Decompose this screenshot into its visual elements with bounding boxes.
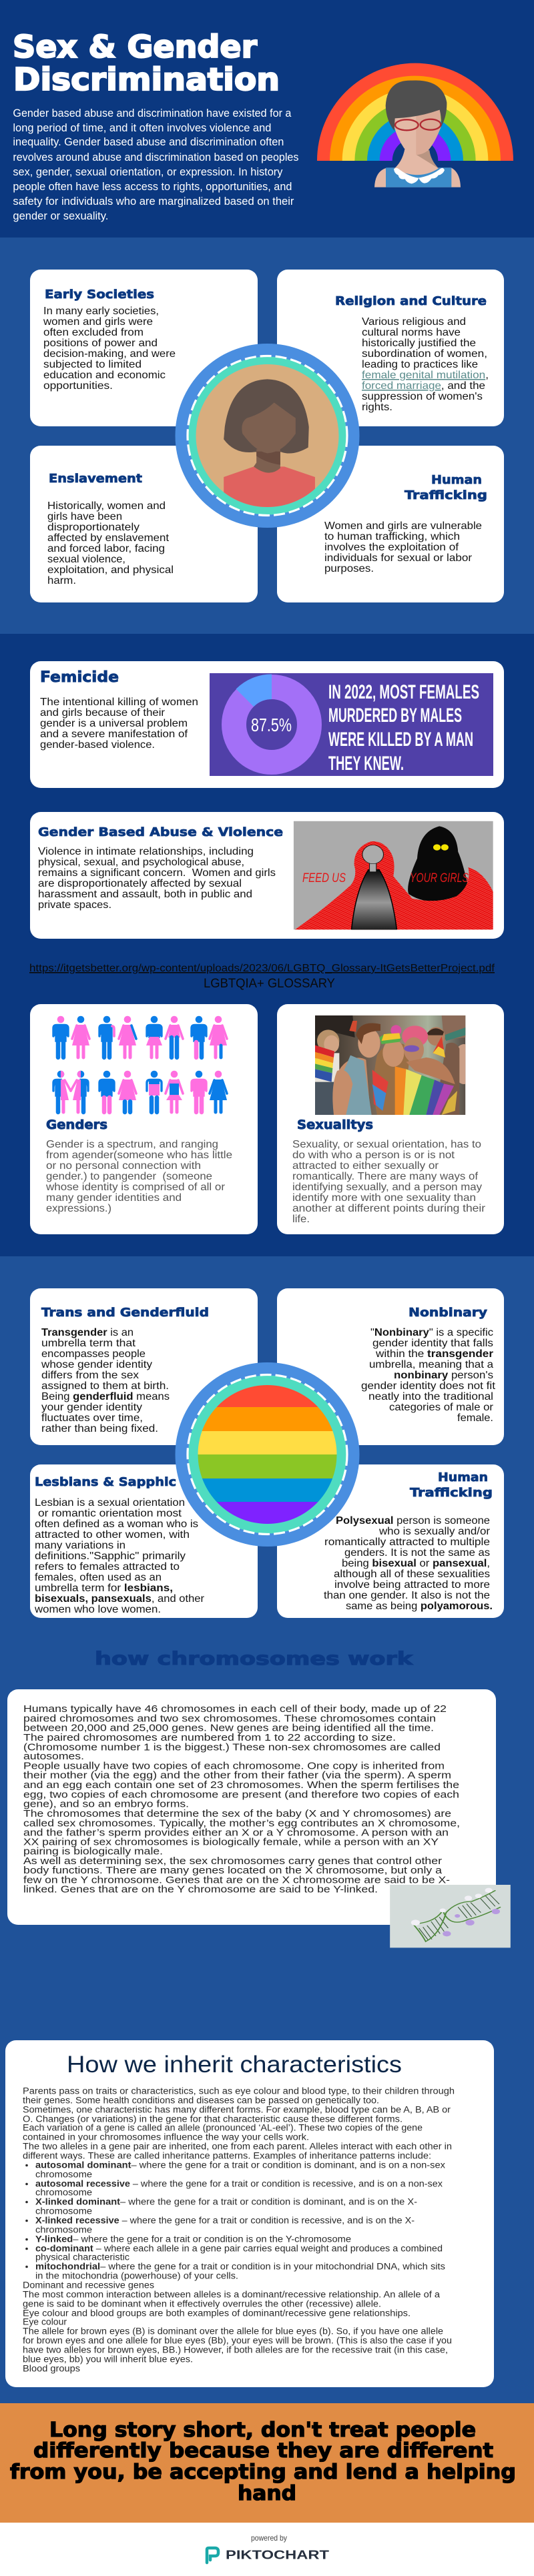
panel: genders xyxy=(30,1004,258,1234)
text: human trafficking: to human trafficking, which xyxy=(324,531,460,542)
list: inheritance patterns: chromosome xyxy=(35,2170,92,2180)
text: inheritance intro: O. Changes (or variations) in the gene for that characteristic cause these different forms. xyxy=(23,2114,403,2124)
text: dominant and recessive genes: Dominant and recessive genes xyxy=(23,2280,154,2290)
text: chromosomes: linked. Genes that are on the Y chromosome are said to be Y-linked. xyxy=(23,1884,378,1895)
text: inheritance intro xyxy=(23,2086,455,2161)
text: chromosomes: The chromosomes that determine the sex of the baby (X and Y chromosomes) are xyxy=(23,1808,451,1819)
title xyxy=(13,29,280,97)
title: Sex & Gender xyxy=(13,29,257,65)
text: nonbinary: "Nonbinary" is a specific xyxy=(370,1327,493,1338)
text: dominant and recessive genes xyxy=(23,2280,452,2374)
text: dominant and recessive genes: Blood groups xyxy=(23,2364,80,2374)
text: polysexual: although all of these sexualities xyxy=(334,1569,490,1580)
text: nonbinary xyxy=(361,1327,496,1424)
text: human trafficking: Women and girls are vulnerable xyxy=(324,520,482,532)
text: dominant and recessive genes: The most common interaction between alleles is a dominant/recessive relationship. An allele of a xyxy=(23,2290,441,2300)
chart: 87.5% donut statistic: THEY KNEW. xyxy=(328,753,404,775)
text: inheritance intro: The two alleles in a gene pair are inherited, one from each parent. Alleles interact with each other in xyxy=(23,2142,452,2152)
text: religion and culture: forced marriage , and the xyxy=(362,380,485,392)
text: gender based abuse xyxy=(38,846,276,911)
text: trans and genderfluid: your gender identity xyxy=(41,1402,142,1413)
text: chromosomes: between 20,000 and 25,000 genes. New genes are being identified all the time. xyxy=(23,1723,434,1734)
panel: enslavement xyxy=(30,446,258,602)
text: genders: expressions.) xyxy=(46,1203,111,1214)
text: chromosomes: paired chromosomes and two sex chromosomes. These chromosomes contain xyxy=(23,1713,436,1724)
intro text: people often have less access to rights, opportunities, and xyxy=(13,180,292,193)
text: sexualitys: identifying sexually, and a person may xyxy=(292,1182,482,1193)
text: polysexual: who is sexually and/or xyxy=(378,1526,491,1537)
footer: powered by piktochart: PIKTOCHART xyxy=(226,2549,329,2562)
text: femicide: gender is a universal problem xyxy=(40,718,188,729)
text: chromosomes: autosomes. xyxy=(23,1751,84,1762)
text: trans and genderfluid: encompasses people xyxy=(41,1348,146,1360)
text: polysexual: Polysexual person is someone xyxy=(336,1515,490,1527)
text: human trafficking xyxy=(324,520,482,574)
text: lesbians and sapphic: refers to females attracted to xyxy=(35,1561,180,1573)
text: dominant and recessive genes: for brown eyes and one allele for blue eyes (Bb), your eyes will be brown. (This is also the case if you xyxy=(23,2335,452,2345)
text: enslavement: and forced labor, facing xyxy=(47,543,165,554)
text: genders: whose identity is comprised of all or xyxy=(45,1182,226,1193)
text: lesbians and sapphic: attracted to other women, with xyxy=(35,1529,190,1541)
text: genders xyxy=(45,1139,232,1214)
text: genders: gender.) to pangender (someone xyxy=(46,1171,212,1182)
text: human trafficking: involves the exploitation of xyxy=(324,542,459,553)
text: early societies: opportunities. xyxy=(43,380,113,392)
text: sexualitys xyxy=(292,1139,486,1225)
heading: nonbinary: Nonbinary xyxy=(409,1306,487,1320)
footer: powered by piktochart: powered by xyxy=(251,2533,287,2543)
illustration: red cloaked girl and shadow figure: YOUR GIRLS xyxy=(410,871,469,885)
text: sexualitys: romantically. There are many ways of xyxy=(292,1171,479,1182)
list: inheritance patterns: X-linked recessive – where the gene for a trait or condition is recessive, and is on the X- xyxy=(35,2216,415,2226)
text: religion and culture: Various religious and xyxy=(362,316,466,328)
list: inheritance patterns: chromosome xyxy=(35,2225,92,2235)
panel: religion and culture xyxy=(277,270,504,426)
chart: 87.5% donut statistic: 87.5% xyxy=(251,715,292,735)
text: chromosomes xyxy=(23,1703,460,1895)
text: inheritance intro: Each variation of a gene is called an allele (pronounced ‘AL-eel’). These two copies of the gene xyxy=(23,2123,423,2133)
text: nonbinary: gender identity that falls xyxy=(372,1338,493,1349)
intro text: revolves around abuse and discrimination based on peoples xyxy=(13,151,298,163)
text: trans and genderfluid: assigned to them at birth. xyxy=(41,1380,169,1392)
panel: trans and genderfluid xyxy=(30,1288,258,1445)
text: dominant and recessive genes: Eye colour and blood groups are both examples of dominant/recessive gene relationships. xyxy=(23,2308,411,2318)
text: genders: or no personal connection with xyxy=(46,1160,201,1172)
text: enslavement: girls have been xyxy=(47,511,122,522)
heading: how we inherit characteristics: How we inherit characteristics xyxy=(67,2052,402,2078)
intro text: Gender based abuse and discrimination have existed for a xyxy=(13,107,292,119)
text: nonbinary: neatly into the traditional xyxy=(368,1391,493,1402)
text: religion and culture: female genital mutilation , xyxy=(362,370,489,381)
text: religion and culture: rights. xyxy=(362,402,392,413)
text: nonbinary: gender identity does not fit xyxy=(361,1380,496,1392)
list: inheritance patterns: mitochondrial – where the gene for a trait or condition is in your mitochondrial DNA, which sits xyxy=(35,2262,445,2272)
text: religion and culture: leading to practices like xyxy=(362,359,478,370)
text: trans and genderfluid: umbrella term that xyxy=(41,1338,136,1349)
image: DNA helix with flowers xyxy=(390,1885,511,1948)
text: chromosomes: body functions. There are many genes located on the X chromosome, but only a xyxy=(23,1865,443,1876)
heading: genders: Genders xyxy=(46,1118,107,1132)
text: chromosomes: XX pairing of sex chromosomes is biologically female, while a person with an XY xyxy=(23,1836,439,1847)
text: nonbinary: within the transgender xyxy=(375,1348,493,1360)
panel: closing message: from you, be accepting and lend a helping xyxy=(10,2461,516,2484)
intro text: safety for individuals who are marginalized based on their xyxy=(13,195,294,207)
glossary link xyxy=(29,963,495,991)
text: polysexual: than one gender. It also is not the xyxy=(324,1590,490,1601)
text: religion and culture: historically justified the xyxy=(362,338,476,349)
intro text: long period of time, and it often involves violence and xyxy=(13,121,271,134)
text: trans and genderfluid: Transgender is an xyxy=(41,1327,134,1338)
text: enslavement: sexual violence, xyxy=(47,554,125,565)
text: nonbinary: umbrella, meaning that a xyxy=(369,1359,493,1370)
panel: closing message: differently because they are different xyxy=(33,2439,493,2463)
text: lesbians and sapphic: or romantic orientation most xyxy=(38,1508,182,1519)
intro text: inequality. Gender based abuse and discrimination often xyxy=(13,135,284,148)
text: chromosomes: called sex chromosomes. Typically, the mother’s egg contributes an X chromosome, xyxy=(23,1817,460,1829)
title: Discrimination xyxy=(13,61,280,97)
text: nonbinary: categories of male or xyxy=(389,1402,494,1413)
text: religion and culture: cultural norms have xyxy=(362,327,461,338)
list: inheritance patterns: Y-linked – where the gene for a trait or condition is on the Y-chromosome xyxy=(35,2234,351,2244)
text: enslavement xyxy=(47,500,174,586)
text: enslavement: affected by enslavement xyxy=(47,532,170,544)
text: chromosomes: and the father’s sperm provides either an X or a Y chromosome. A person with an xyxy=(23,1827,449,1839)
text: femicide: and a severe manifestation of xyxy=(40,729,188,740)
heading: trans and genderfluid: Trans and Genderfluid xyxy=(41,1306,209,1320)
panel: early societies xyxy=(30,270,258,426)
heading: human trafficking: Trafficking xyxy=(405,488,487,502)
text: chromosomes: (Chromosome number 1 is the biggest.) These non-sex chromosomes are called xyxy=(23,1741,441,1753)
text: lesbians and sapphic: women who love women. xyxy=(34,1604,161,1615)
intro text: sex, gender, sexual orientation, or expression. In history xyxy=(13,165,283,178)
text: polysexual: romantically attracted to multiple xyxy=(324,1537,490,1548)
text: trans and genderfluid: rather than being fixed. xyxy=(41,1423,158,1434)
text: inheritance intro: Parents pass on traits or characteristics, such as eye colour and blood type, to their children through xyxy=(23,2086,455,2096)
text: human trafficking: individuals for sexual or labor xyxy=(324,552,473,564)
list: inheritance patterns: autosomal dominant – where the gene for a trait or condition is dominant, and is on a non-sex xyxy=(35,2160,445,2170)
panel: chromosomes xyxy=(7,1689,496,1925)
text: chromosomes: Humans typically have 46 chromosomes in each cell of their body, made up of 22 xyxy=(23,1703,447,1715)
heading: religion and culture: Religion and Culture xyxy=(335,294,487,308)
text: polysexual xyxy=(324,1515,493,1612)
panel: closing message: hand xyxy=(238,2482,296,2505)
list: inheritance patterns: X-linked dominant – where the gene for a trait or condition is dominant, and is on the X- xyxy=(35,2197,417,2207)
text: early societies: In many early societies, xyxy=(43,306,159,317)
text: chromosomes: The paired chromosomes are numbered from 1 to 22 according to size. xyxy=(23,1732,396,1743)
text: chromosomes: and an egg each contain one set of 23 chromosomes. When the sperm fertilises the xyxy=(23,1779,459,1791)
text: sexualitys: Sexuality, or sexual orientation, has to xyxy=(292,1139,481,1150)
text: sexualitys: identify more with one sexuality than xyxy=(292,1192,476,1204)
text: gender based abuse: physical, sexual, and psychological abuse, xyxy=(38,857,244,868)
row 1 xyxy=(53,1016,68,1057)
text: dominant and recessive genes: The allele for brown eyes (B) is dominant over the allele for blue eyes (b). So, if you have one allele xyxy=(23,2326,443,2336)
text: femicide: and girls because of their xyxy=(40,707,166,719)
footer: powered by piktochart xyxy=(207,2533,329,2563)
icon: rainbow circle xyxy=(175,1362,359,1547)
list: inheritance patterns: in the mitochondria (powerhouse) of your cells. xyxy=(35,2271,238,2281)
text: genders: many gender identities and xyxy=(46,1192,182,1204)
text: early societies: education and economic xyxy=(43,370,166,381)
text: gender based abuse: are disproportionately affected by sexual xyxy=(38,878,242,889)
text: chromosomes: As well as determining sex, the sex chromosomes carry genes that control other xyxy=(23,1855,442,1867)
illustration: red cloaked girl and shadow figure xyxy=(294,821,493,929)
glossary link: https://itgetsbetter.org/wp-content/uploads/2023/06/LGBTQ_Glossary-ItGetsBetterProject.pdf xyxy=(29,963,495,974)
text: inheritance intro: different ways. These are called inheritance patterns. Examples of inheritance patterns include: xyxy=(23,2151,431,2161)
text: gender based abuse: harassment and assault, both in public and xyxy=(38,889,252,900)
panel: gender based abuse and violence xyxy=(30,812,504,939)
heading: gender based abuse and violence: Gender Based Abuse & Violence xyxy=(38,825,283,839)
heading: human trafficking second: Human xyxy=(438,1470,488,1484)
text: trans and genderfluid: whose gender identity xyxy=(41,1359,152,1370)
text: dominant and recessive genes: gene is said to be dominant when it effectively overrules the other (recessive) allele. xyxy=(23,2299,381,2309)
heading: how chromosomes work: how chromosomes work xyxy=(95,1649,413,1669)
list: inheritance patterns: autosomal recessive – where the gene for a trait or condition is recessive, and is on a non-sex xyxy=(35,2179,443,2189)
list: inheritance patterns: physical characteristic xyxy=(35,2252,129,2262)
text: early societies: women and girls were xyxy=(43,316,153,328)
text: early societies: often excluded from xyxy=(43,327,144,338)
panel: closing message xyxy=(0,2403,534,2523)
text: human trafficking: purposes. xyxy=(324,563,374,574)
text: gender based abuse: remains a significant concern. Women and girls xyxy=(38,867,276,879)
row 2 xyxy=(53,1071,71,1112)
text: lesbians and sapphic: bisexuals, pansexuals , and other xyxy=(35,1593,205,1605)
list: inheritance patterns: chromosome xyxy=(35,2206,92,2216)
intro text: gender or sexuality. xyxy=(13,209,108,222)
text: sexualitys: another at different points during their xyxy=(292,1203,486,1214)
text: gender based abuse: private spaces. xyxy=(38,899,111,911)
text: chromosomes: their mother (via the egg) and the other from their father (via the sperm). A sperm xyxy=(23,1770,451,1781)
text: genders: from agender(someone who has little xyxy=(46,1150,232,1161)
list: inheritance patterns: co-dominant – where each allele in a gene pair carries equal weight and produces a combined xyxy=(35,2244,443,2254)
text: religion and culture xyxy=(362,316,489,413)
text: nonbinary: nonbinary person's xyxy=(394,1370,493,1381)
text: religion and culture: subordination of women, xyxy=(362,348,487,360)
text: sexualitys: life. xyxy=(292,1214,310,1225)
text: enslavement: Historically, women and xyxy=(47,500,166,512)
image: pride parade friends xyxy=(315,1015,475,1115)
text: chromosomes: gene), and so an embryo forms. xyxy=(23,1799,189,1810)
panel: sexualitys xyxy=(277,1004,504,1234)
text: inheritance intro: Sometimes, one characteristic has many different forms. For example, blood type can be A, B, AB or xyxy=(23,2105,451,2115)
text: inheritance intro: contained in your chromosomes influence the way your cells work. xyxy=(23,2132,309,2142)
heading: human trafficking second xyxy=(410,1470,493,1500)
icon: gender figures xyxy=(53,1016,227,1112)
text: early societies xyxy=(43,306,176,392)
text: polysexual: being bisexual or pansexual, xyxy=(342,1558,490,1569)
text: trans and genderfluid: fluctuates over time, xyxy=(41,1412,143,1424)
panel: closing message: Long story short, don't treat people xyxy=(49,2419,476,2442)
text: lesbians and sapphic: many variations in xyxy=(35,1540,125,1551)
heading: human trafficking: Human xyxy=(431,473,482,487)
icon: piktochart logo xyxy=(207,2548,218,2563)
text: chromosomes: pairing is biologically male. xyxy=(23,1846,163,1857)
text: trans and genderfluid xyxy=(41,1327,170,1434)
text: trans and genderfluid: Being genderfluid means xyxy=(41,1391,170,1402)
glossary link: LGBTQIA+ GLOSSARY xyxy=(204,977,335,991)
text: chromosomes: People usually have two copies of each chromosome. One copy is inherited from xyxy=(23,1760,445,1771)
text: chromosomes: few on the Y chromosome. Genes that are on the X chromosome are said to be X- xyxy=(23,1874,450,1885)
text: polysexual: same as being polyamorous. xyxy=(346,1601,493,1612)
text: femicide xyxy=(40,697,198,751)
intro text xyxy=(13,107,298,222)
icon: woman portrait in circle xyxy=(175,344,359,528)
text: trans and genderfluid: differs from the sex xyxy=(41,1370,139,1381)
text: lesbians and sapphic: Lesbian is a sexual orientation xyxy=(35,1497,185,1509)
text: lesbians and sapphic: definitions."Sapphic" primarily xyxy=(35,1551,186,1562)
text: lesbians and sapphic: females, often used as an xyxy=(35,1572,162,1583)
text: enslavement: disproportionately xyxy=(47,522,140,533)
text: chromosomes: egg, two copies of each chromosome are present (and therefore two copies of each xyxy=(23,1789,459,1800)
panel: nonbinary xyxy=(277,1288,504,1445)
heading: enslavement: Enslavement xyxy=(49,472,142,486)
text: polysexual: involve being attracted to more xyxy=(334,1579,490,1591)
text: nonbinary: female. xyxy=(457,1412,493,1424)
text: religion and culture: suppression of women's xyxy=(362,391,483,402)
text: inheritance intro: their genes. Some health conditions and diseases can be passed on genetically too. xyxy=(23,2096,379,2106)
text: dominant and recessive genes: Eye colour xyxy=(23,2317,67,2327)
text: femicide: gender-based violence. xyxy=(40,739,155,751)
text: gender based abuse: Violence in intimate relationships, including xyxy=(38,846,254,857)
heading: early societies: Early Societies xyxy=(45,288,154,302)
icon: woman in front of rainbow xyxy=(317,63,513,187)
heading: sexualitys: Sexualitys xyxy=(297,1118,373,1132)
text: early societies: subjected to limited xyxy=(43,359,142,370)
panel: polysexual human trafficking xyxy=(277,1464,504,1618)
heading: human trafficking xyxy=(405,473,487,502)
chart: 87.5% donut statistic xyxy=(210,673,493,776)
text: dominant and recessive genes: blue eyes, bb) you will inherit blue eyes. xyxy=(23,2354,193,2364)
text: lesbians and sapphic xyxy=(34,1497,205,1615)
list: inheritance patterns xyxy=(25,2160,445,2281)
heading: human trafficking second: Trafficking xyxy=(410,1486,493,1500)
panel: how we inherit characteristics xyxy=(5,2040,494,2387)
panel: lesbians and sapphic xyxy=(30,1464,258,1618)
heading: femicide: Femicide xyxy=(40,669,119,686)
text: early societies: positions of power and xyxy=(43,338,158,349)
text: femicide: The intentional killing of women xyxy=(40,697,198,708)
panel: femicide xyxy=(30,661,504,788)
list: inheritance patterns: chromosome xyxy=(35,2188,92,2198)
text: enslavement: exploitation, and physical xyxy=(47,564,174,576)
panel: human trafficking xyxy=(277,446,504,602)
text: sexualitys: do with who a person is or is not xyxy=(292,1150,455,1161)
text: polysexual: genders. It is not the same as xyxy=(344,1547,490,1559)
text: early societies: decision-making, and were xyxy=(43,348,176,360)
illustration: red cloaked girl and shadow figure: FEED US xyxy=(302,871,346,885)
text: genders: Gender is a spectrum, and ranging xyxy=(46,1139,218,1150)
text: enslavement: harm. xyxy=(47,575,76,586)
text: lesbians and sapphic: umbrella term for lesbians, xyxy=(35,1583,173,1594)
text: lesbians and sapphic: often defined as a woman who is xyxy=(35,1519,198,1530)
heading: lesbians and sapphic: Lesbians & Sapphic xyxy=(35,1475,176,1489)
text: dominant and recessive genes: have two alleles for brown eyes, BB.) However, if both alleles are for the recessive trait (in this case, xyxy=(23,2344,448,2354)
text: sexualitys: attracted to either sexually or xyxy=(292,1160,439,1172)
